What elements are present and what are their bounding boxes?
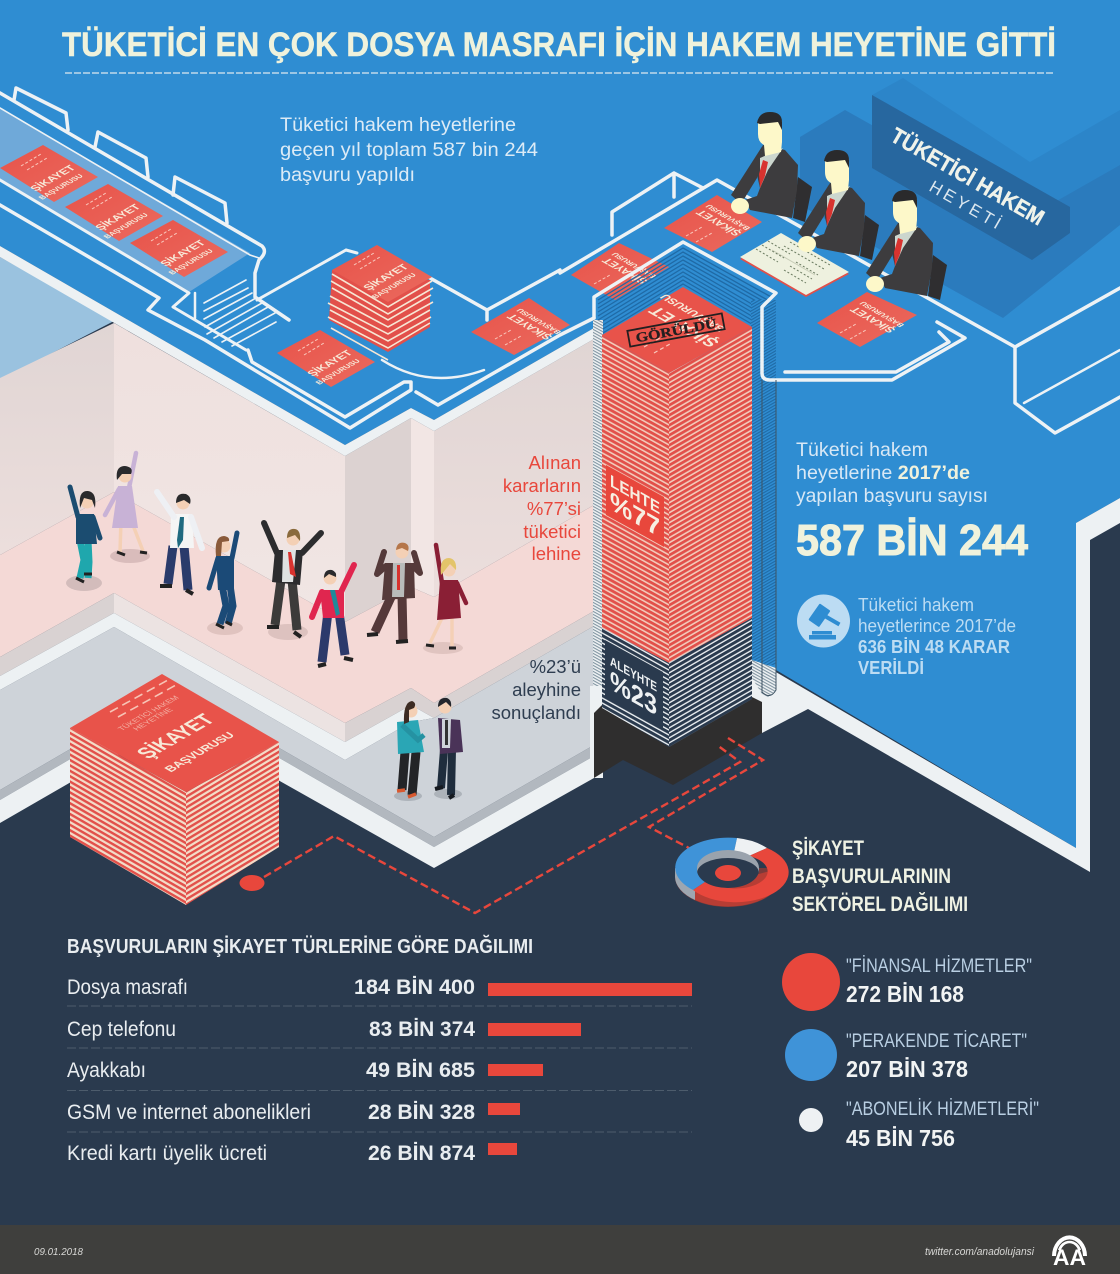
card: first judge <box>664 195 762 252</box>
donut chart: sector share <box>675 838 789 907</box>
judge 1 <box>731 112 812 222</box>
judge 2 <box>798 150 879 260</box>
judge 3 <box>866 190 947 300</box>
legend item: perakende: "PERAKENDE TİCARET" <box>846 1031 1027 1052</box>
text block: applications in 2017: yapılan başvuru sayısı <box>796 485 988 507</box>
person: woman maroon <box>423 545 466 654</box>
line network on the blue floor <box>0 88 1120 433</box>
person: man white shirt <box>157 492 202 594</box>
legend item: finans <box>782 953 1032 1011</box>
row: kredi kartı: Kredi kartı üyelik ücreti <box>67 1142 267 1165</box>
text block: decisions: heyetlerince 2017’de <box>858 616 1016 636</box>
text block: decisions: Tüketici hakem <box>858 595 974 615</box>
row: cep telefonu: Cep telefonu <box>67 1018 176 1041</box>
row: cep telefonu <box>67 1018 581 1041</box>
legend item: abonelik: "ABONELİK HİZMETLERİ" <box>846 1099 1039 1120</box>
source: twitter.com/anadolujansi <box>925 1246 1035 1258</box>
text block: 77 percent in favour: lehine <box>532 543 581 564</box>
card: rotated near rail: BAŞVURUSU <box>609 251 658 279</box>
text block: 23 percent against: sonuçlandı <box>492 702 581 723</box>
card: şikayet başvurusu 3: ŞİKAYET <box>157 238 209 268</box>
text block: 77 percent in favour: %77’si <box>527 498 581 519</box>
text block: 77 percent in favour: tüketici <box>523 521 581 542</box>
panel: blue upper floor <box>0 0 1120 848</box>
icon: AA logo: AA <box>1053 1245 1086 1270</box>
text block: intro <box>280 115 538 186</box>
row: dosya masrafı: Dosya masrafı <box>67 976 188 999</box>
badge: lehte %77: %77 <box>610 486 660 543</box>
title: TÜKETİCİ EN ÇOK DOSYA MASRAFI İÇİN HAKEM HEYETİNE GİTTİ <box>62 26 1056 64</box>
text block: 77 percent in favour: Alınan <box>529 452 581 473</box>
card: rotated near rail <box>571 243 669 300</box>
text block: 23 percent against: aleyhine <box>512 679 581 700</box>
paper strip under the conveyor <box>195 280 276 346</box>
legend item: finans: "FİNANSAL HİZMETLER" <box>846 956 1032 977</box>
card: şikayet başvurusu 3 <box>130 220 228 277</box>
heading: sector distribution: BAŞVURULARININ <box>792 865 951 888</box>
stack of cards: BAŞVURUSU <box>369 272 418 300</box>
card: rotated on floor: BAŞVURUSU <box>514 307 563 335</box>
card: şikayet başvurusu 2: BAŞVURUSU <box>101 212 150 240</box>
row: gsm: 28 BİN 328 <box>368 1101 475 1124</box>
heading: sector distribution <box>792 837 968 916</box>
panel: white floor edge right <box>752 498 1120 872</box>
text block: applications in 2017: heyetlerine 2017’de <box>796 462 970 484</box>
person: woman lilac <box>105 453 150 563</box>
row: ayakkabı <box>67 1059 543 1082</box>
big cube of complaint files: BAŞVURUSU <box>161 730 238 774</box>
card: rotated on floor <box>471 298 570 355</box>
icon: AA logo <box>1052 1235 1087 1270</box>
footer bar <box>0 1225 1120 1274</box>
heading: sector distribution: SEKTÖREL DAĞILIMI <box>792 892 968 916</box>
text block: applications in 2017 <box>796 439 988 507</box>
panel: light blue back room <box>0 257 114 380</box>
row: ayakkabı: 49 BİN 685 <box>366 1059 475 1082</box>
text block: 77 percent in favour: kararların <box>503 475 581 496</box>
panel: walls and floors of the lower room <box>0 323 603 868</box>
row: dosya masrafı <box>67 976 692 999</box>
row: kredi kartı <box>67 1142 517 1165</box>
person: man brown suit <box>367 543 420 642</box>
row: cep telefonu: 83 BİN 374 <box>369 1018 475 1041</box>
people talking: man purple jacket <box>434 698 463 799</box>
card: third judge <box>817 292 917 347</box>
tower of complaint files: ŞİKAYET <box>644 304 724 349</box>
card: single on floor: ŞİKAYET <box>304 348 356 378</box>
card: first judge: ŞİKAYET <box>693 208 745 238</box>
badge: aleyhte %23: %23 <box>610 666 657 722</box>
legend item: abonelik <box>799 1099 1039 1151</box>
row: ayakkabı: Ayakkabı <box>67 1059 146 1082</box>
open record book <box>740 233 849 297</box>
card: şikayet başvurusu 1: BAŞVURUSU <box>36 173 85 201</box>
card: third judge: BAŞVURUSU <box>857 300 906 328</box>
text block: intro: geçen yıl toplam 587 bin 244 <box>280 140 538 161</box>
tower of complaint files: BAŞVURUSU <box>658 292 729 333</box>
conveyor band <box>0 108 250 292</box>
text block: 23 percent against <box>492 656 581 723</box>
card: single on floor: BAŞVURUSU <box>313 358 362 386</box>
person: woman navy <box>207 533 243 635</box>
card: first judge: BAŞVURUSU <box>703 203 752 231</box>
text block: decisions: VERİLDİ <box>858 658 924 678</box>
tower of complaint files <box>602 287 752 747</box>
card: rotated near rail: ŞİKAYET <box>599 256 651 286</box>
legend item: perakende <box>785 1029 1027 1082</box>
connector start dot <box>240 875 264 891</box>
date: 09.01.2018 <box>34 1246 83 1258</box>
person: man red sweater <box>312 565 354 666</box>
badge: aleyhte %23 <box>605 640 663 730</box>
bar chart: complaint types <box>67 934 692 1165</box>
card: third judge: ŞİKAYET <box>847 305 899 335</box>
badge: aleyhte %23: ALEYHTE <box>610 653 657 695</box>
text block: decisions: 636 BİN 48 KARAR <box>858 637 1010 657</box>
row: gsm: GSM ve internet abonelikleri <box>67 1101 311 1124</box>
heading: Tüketici Hakem Heyeti plate: HEYETİ <box>926 177 1004 233</box>
legend item: abonelik: 45 BİN 756 <box>846 1125 955 1151</box>
person: man black suit <box>264 523 321 640</box>
legend: sector values <box>782 953 1039 1151</box>
stack of cards <box>328 245 433 360</box>
big cube of complaint files <box>70 674 279 905</box>
icon: gavel <box>797 594 850 648</box>
card: şikayet başvurusu 2: ŞİKAYET <box>92 202 144 232</box>
badge: lehte %77: LEHTE <box>610 470 660 518</box>
text block: decisions <box>858 595 1016 678</box>
dashed connector: cube to tower <box>264 738 763 913</box>
big cube of complaint files: HEYETİNE <box>131 707 175 732</box>
badge: lehte %77 <box>606 465 664 547</box>
panel: raised platform behind the judges <box>800 78 1120 318</box>
legend item: perakende: 207 BİN 378 <box>846 1056 968 1082</box>
legend item: finans: 272 BİN 168 <box>846 981 964 1007</box>
tower base <box>594 697 762 785</box>
card: şikayet başvurusu 1: ŞİKAYET <box>27 163 79 193</box>
card: şikayet başvurusu 1 <box>0 145 98 202</box>
heading: sector distribution: ŞİKAYET <box>792 837 864 860</box>
chart heading: BAŞVURULARIN ŞİKAYET TÜRLERİNE GÖRE DAĞILIMI <box>67 934 533 958</box>
text block: applications in 2017: Tüketici hakem <box>796 439 928 461</box>
text block: 77 percent in favour <box>503 452 581 564</box>
stack of cards: ŞİKAYET <box>360 262 412 292</box>
big cube of complaint files: ŞİKAYET <box>131 710 221 762</box>
text block: intro: Tüketici hakem heyetlerine <box>280 115 516 136</box>
people talking: man teal sweater <box>394 701 424 801</box>
text block: intro: başvuru yapıldı <box>280 165 415 186</box>
stamp: görüldü: GÖRÜLDÜ <box>634 316 718 345</box>
ghost outline stack around the tower <box>593 242 965 698</box>
stamp: görüldü <box>627 313 725 347</box>
row: kredi kartı: 26 BİN 874 <box>368 1142 475 1165</box>
heading: Tüketici Hakem Heyeti plate: TÜKETİCİ HAKEM <box>887 123 1049 230</box>
card: single on floor <box>277 330 375 387</box>
text block: 23 percent against: %23’ü <box>530 656 581 677</box>
big number: 587 bin 244: 587 BİN 244 <box>796 516 1028 565</box>
row: dosya masrafı: 184 BİN 400 <box>354 976 475 999</box>
person: woman teal <box>66 487 102 591</box>
card: şikayet başvurusu 2 <box>65 184 163 241</box>
big cube of complaint files: TÜKETİCİ HAKEM <box>116 694 181 732</box>
card: rotated on floor: ŞİKAYET <box>504 312 556 342</box>
panel: white wall top edge <box>0 246 594 456</box>
card: şikayet başvurusu 3: BAŞVURUSU <box>166 248 215 276</box>
row: gsm <box>67 1101 520 1124</box>
